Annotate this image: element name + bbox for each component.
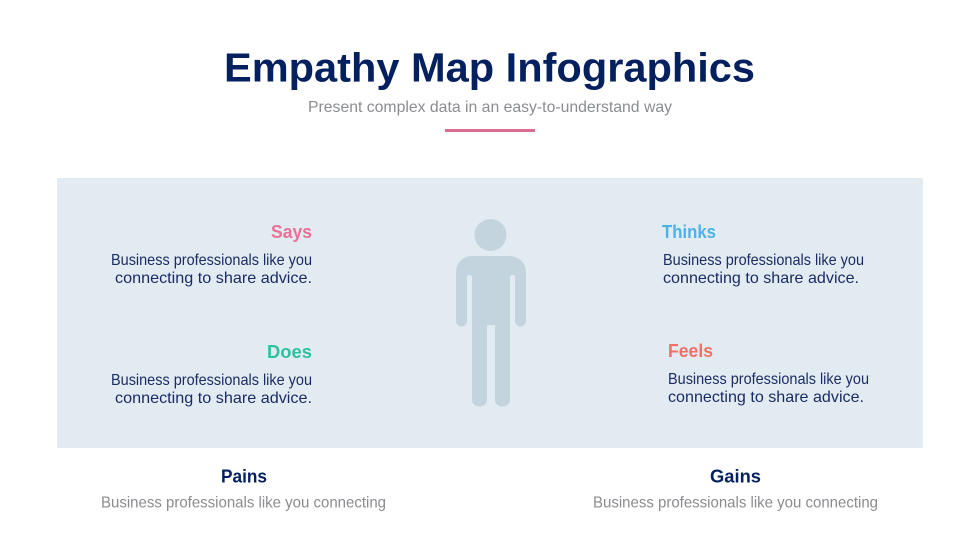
block: pains bbox=[101, 466, 386, 512]
block: says: Business professionals like you bbox=[111, 252, 312, 269]
block: feels bbox=[668, 340, 869, 406]
block: pains: Pains bbox=[221, 466, 267, 486]
icon: person figure bbox=[456, 219, 526, 406]
block: does: Business professionals like you bbox=[111, 372, 312, 389]
block: says bbox=[111, 221, 312, 287]
block: thinks: connecting to share advice. bbox=[663, 270, 859, 287]
subtitle: Present complex data in an easy-to-understand way bbox=[308, 99, 672, 116]
block: does bbox=[111, 341, 312, 407]
block: does: Does bbox=[267, 341, 312, 362]
block: thinks: Thinks bbox=[662, 221, 716, 242]
block: thinks: Business professionals like you bbox=[663, 252, 864, 269]
block: feels: connecting to share advice. bbox=[668, 389, 864, 406]
header bbox=[224, 44, 755, 132]
block: thinks bbox=[662, 221, 864, 287]
title: Empathy Map Infographics bbox=[224, 44, 755, 90]
block: gains: Business professionals like you connecting bbox=[593, 494, 878, 512]
block: gains bbox=[593, 466, 878, 512]
panel background bbox=[57, 178, 923, 448]
block: pains: Business professionals like you connecting bbox=[101, 494, 386, 512]
block: does: connecting to share advice. bbox=[115, 390, 312, 407]
block: feels: Business professionals like you bbox=[668, 371, 869, 388]
block: says: Says bbox=[271, 221, 312, 242]
title underline bbox=[445, 129, 535, 132]
block: says: connecting to share advice. bbox=[115, 270, 312, 287]
panel: empathy map bbox=[57, 178, 923, 448]
block: feels: Feels bbox=[668, 340, 713, 361]
block: gains: Gains bbox=[710, 466, 761, 486]
